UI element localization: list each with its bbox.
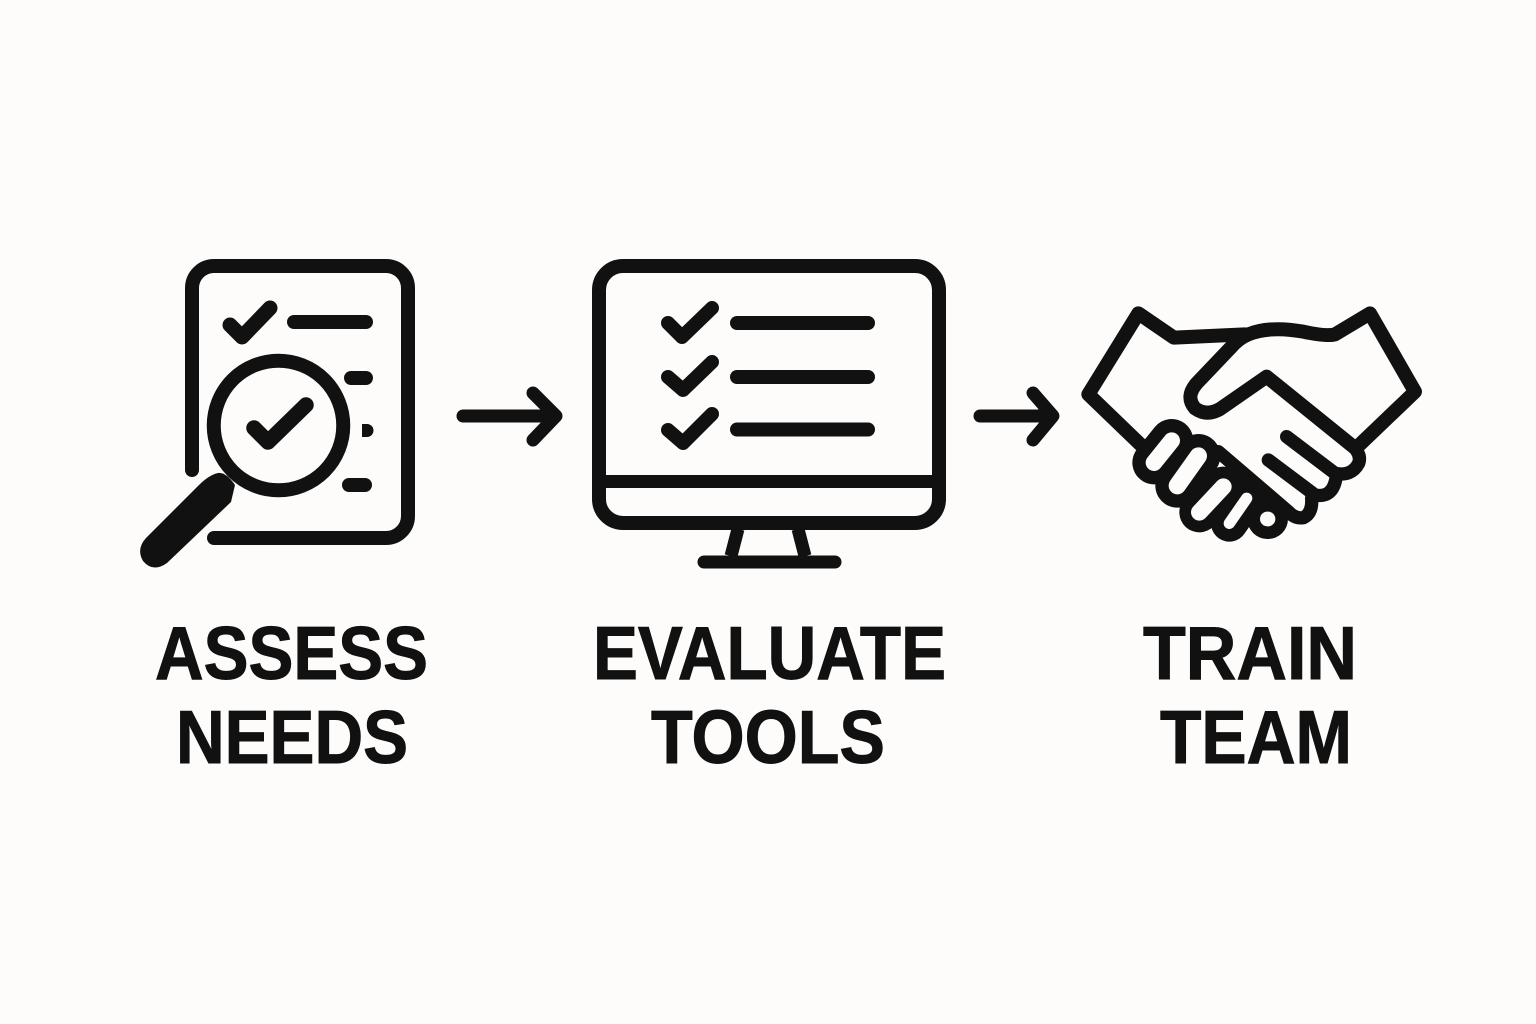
label: evaluate tools: EVALUATE <box>593 611 946 695</box>
left cuff <box>1088 313 1245 446</box>
label: evaluate tools <box>593 611 946 779</box>
label: train team: TEAM <box>1160 695 1352 779</box>
label: evaluate tools: TOOLS <box>651 695 885 779</box>
label: assess needs: ASSESS <box>155 611 428 695</box>
label: assess needs <box>155 611 428 779</box>
right hand fingers <box>1218 437 1359 518</box>
label: train team <box>1143 611 1357 779</box>
right cuff and thumb <box>1190 313 1415 447</box>
monitor screen frame <box>599 266 939 523</box>
first checklist row <box>230 308 366 337</box>
label: train team: TRAIN <box>1143 611 1357 695</box>
right hand body <box>1218 377 1363 512</box>
lens check mark <box>254 405 306 442</box>
short list dashes <box>349 378 374 485</box>
icon: handshake <box>1088 313 1415 523</box>
arrow: evaluate to train <box>980 393 1053 440</box>
document outline <box>192 266 408 538</box>
monitor divider <box>599 475 939 488</box>
magnifier handle <box>140 473 235 568</box>
screen checklist <box>668 308 868 443</box>
icon: checklist document with magnifying glass <box>140 266 408 568</box>
magnifier lens <box>214 361 343 490</box>
monitor stand <box>704 529 835 562</box>
arrow: assess to evaluate <box>463 393 556 440</box>
label: assess needs: NEEDS <box>176 695 408 779</box>
icon: computer monitor with checklist <box>599 266 939 562</box>
left hand knuckles <box>1154 441 1268 523</box>
